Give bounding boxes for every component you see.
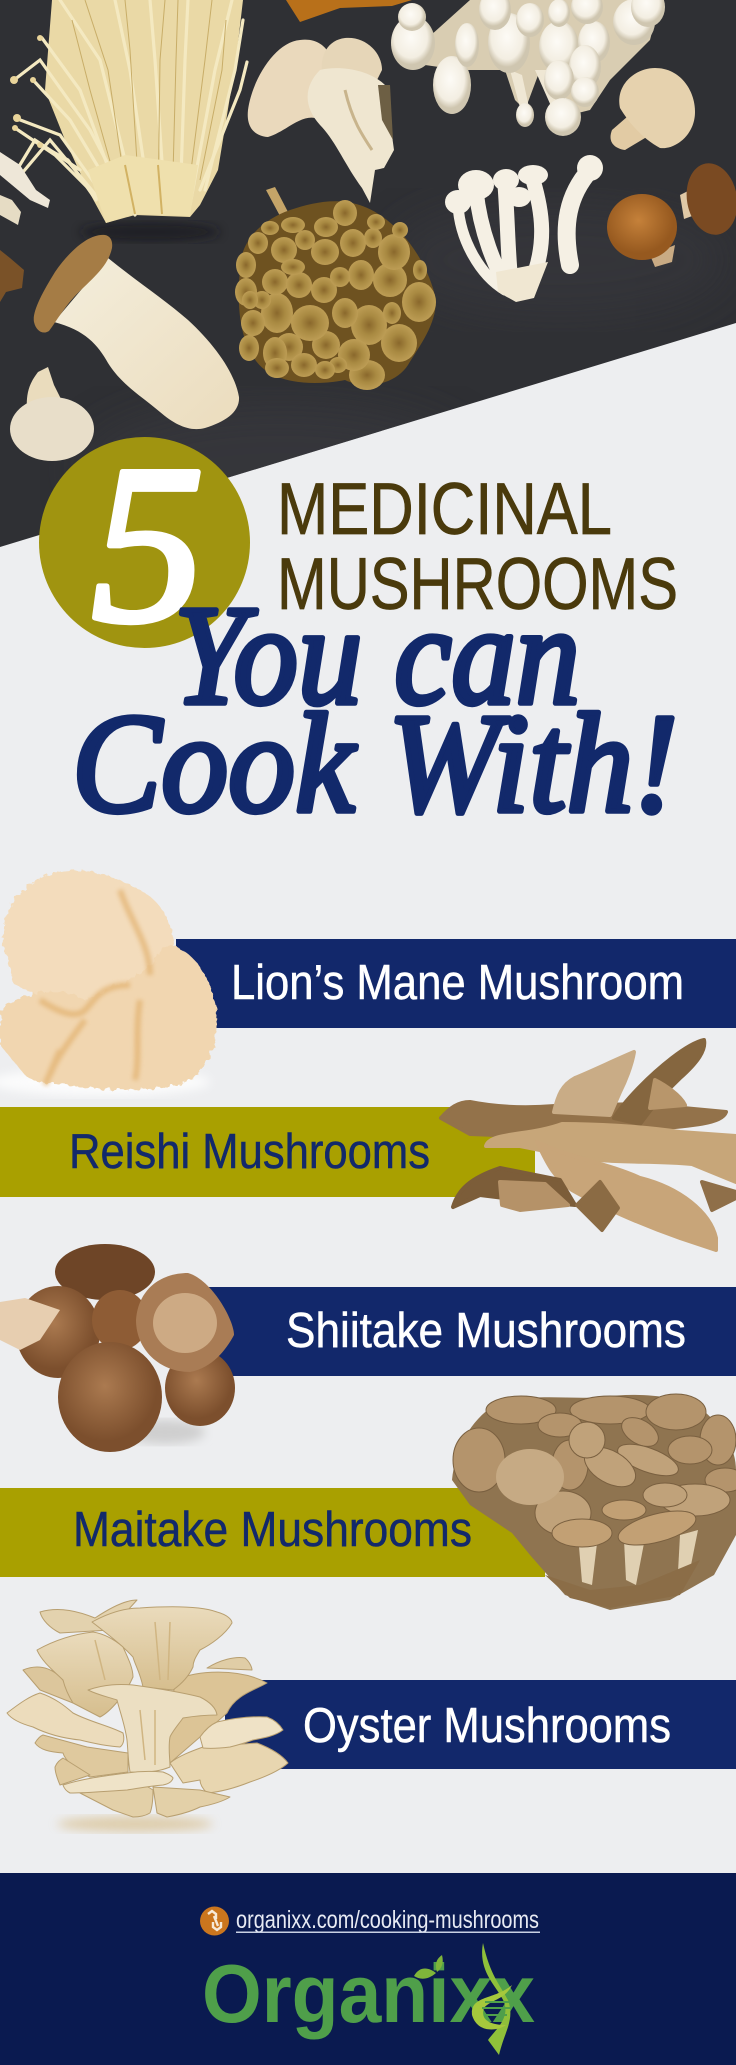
mushroom: shiitake: [0, 1244, 235, 1452]
orange mushroom piece at top edge: [286, 0, 412, 22]
band: shiitake: Shiitake Mushrooms: [286, 1304, 686, 1358]
brown button mushrooms right: [607, 159, 736, 267]
button mushroom top right: [611, 68, 695, 150]
footer: [0, 1873, 736, 2065]
script heading: you can cook with: [72, 576, 678, 842]
url text: organixx.com/cooking-mushrooms: [236, 1906, 539, 1934]
brown beech mushroom cluster: [235, 187, 436, 390]
band: reishi: [0, 1107, 535, 1197]
left edge mushrooms: [0, 152, 50, 302]
band: lion's mane: Lion’s Mane Mushroom: [231, 956, 684, 1010]
band: maitake: Maitake Mushrooms: [73, 1503, 472, 1557]
logo: Organixx: Organixx: [202, 1947, 535, 2040]
band: maitake: [0, 1488, 545, 1577]
button mushroom bottom left: [10, 367, 94, 461]
heading: medicinal mushrooms: MEDICINAL: [277, 469, 612, 550]
number 5: 5: [92, 419, 204, 669]
olive number circle: [39, 437, 250, 648]
enoki mushrooms: [10, 0, 247, 223]
icon: link badge: [200, 1906, 229, 1936]
band: reishi: Reishi Mushrooms: [69, 1125, 430, 1179]
mushroom: oyster: [7, 1600, 288, 1832]
header photo: mushrooms on slate: [0, 0, 736, 550]
king oyster mushroom: [34, 235, 239, 429]
script heading: you can cook with: Cook With!: [72, 684, 678, 842]
white beech mushrooms centre right: [445, 155, 603, 302]
mushroom: maitake: [452, 1394, 736, 1610]
mushroom: reishi: [441, 1040, 736, 1250]
heading: medicinal mushrooms: [277, 469, 678, 625]
band: oyster: [225, 1680, 736, 1769]
band: oyster: Oyster Mushrooms: [303, 1699, 671, 1753]
white beech mushrooms top right: [391, 0, 665, 136]
mushroom: lion's mane: [0, 870, 217, 1096]
band: lion's mane: [176, 939, 736, 1028]
oyster mushroom on slate: [248, 38, 394, 203]
band: shiitake: [205, 1287, 736, 1376]
script heading: you can cook with: You can: [174, 576, 580, 734]
